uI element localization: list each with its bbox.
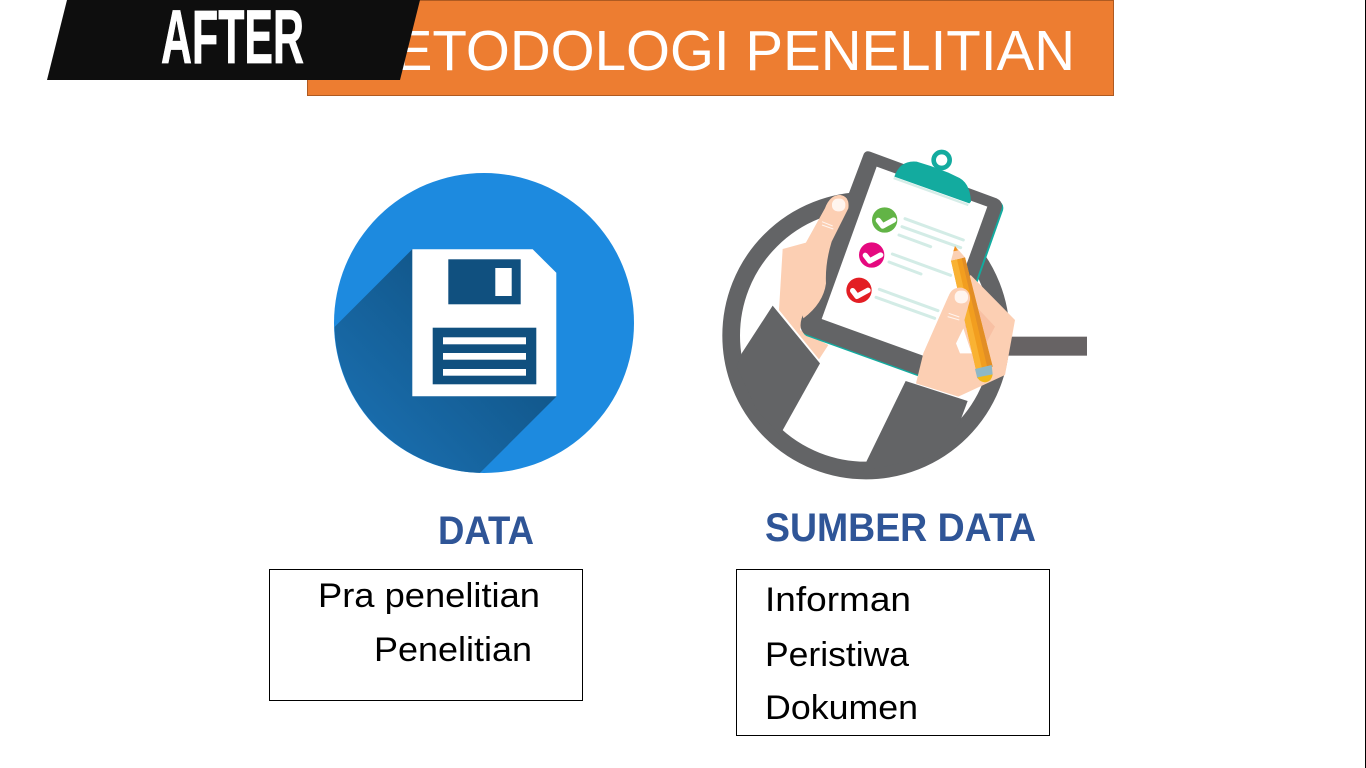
title banner [308,0,1114,96]
title banner: METODOLOGI PENELITIAN [348,19,1075,82]
text box: sumber data list: Dokumen [765,689,918,727]
text box: data list: Penelitian [374,631,532,669]
text box: data list [270,570,582,700]
icon: floppy disk [334,173,634,473]
heading: data: DATA [438,509,534,553]
text box: data list: Pra penelitian [318,577,540,615]
text box: sumber data list [736,570,1050,736]
after badge [47,0,420,80]
text box: sumber data list: Peristiwa [765,636,909,674]
text box: sumber data list: Informan [765,581,911,619]
heading: sumber data: SUMBER DATA [765,506,1036,550]
icon: clipboard checklist with hands [731,151,1087,471]
